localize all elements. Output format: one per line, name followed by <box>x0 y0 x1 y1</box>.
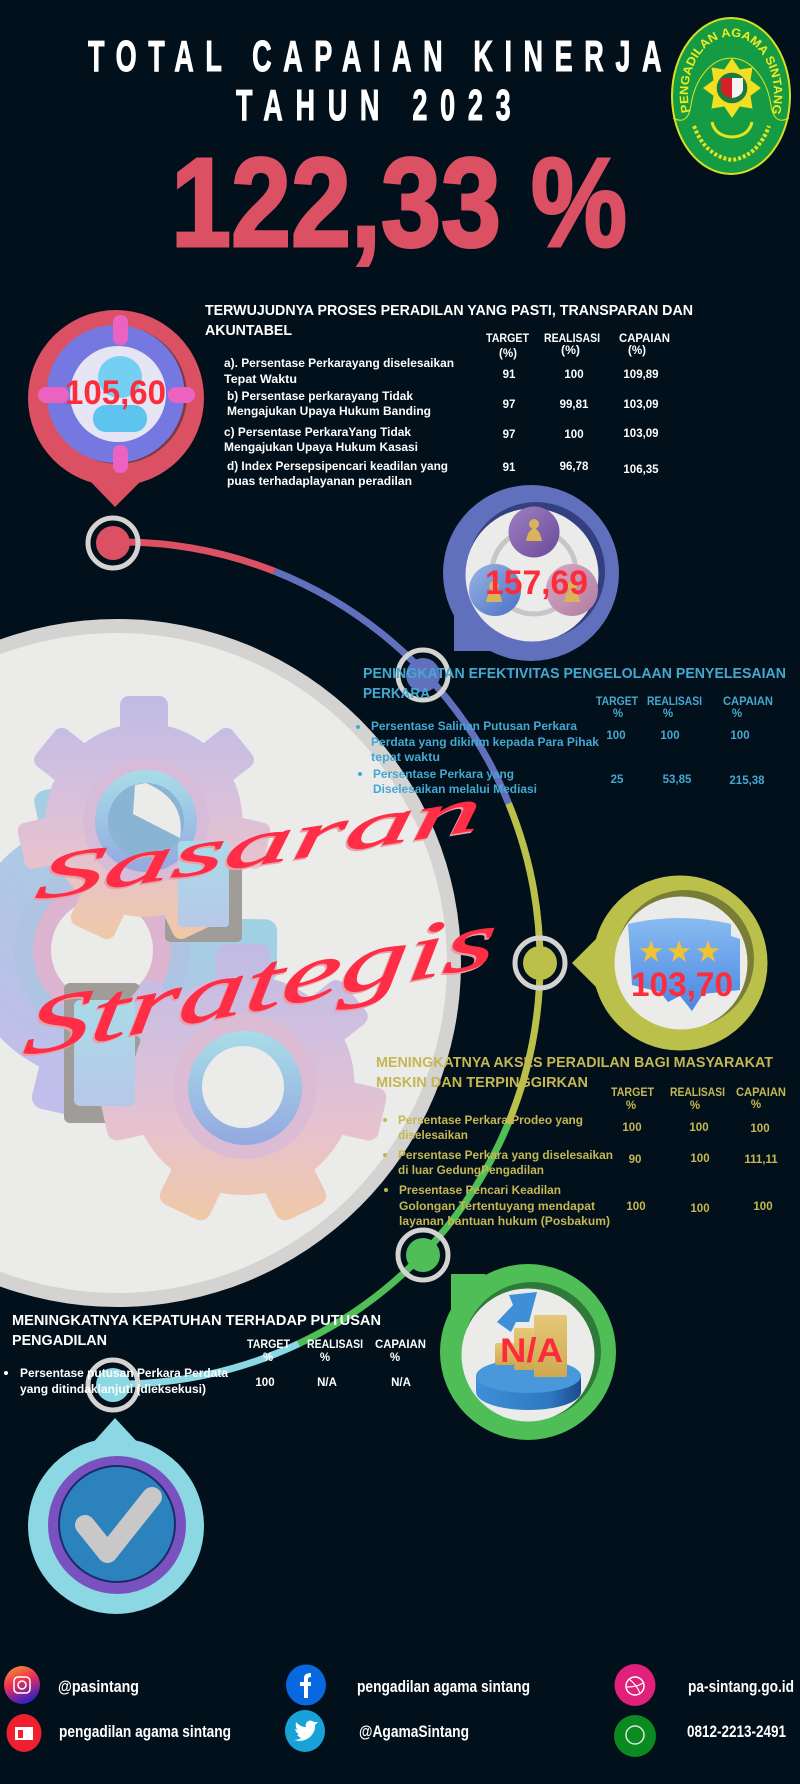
table header: % <box>263 1352 273 1364</box>
script title: Sasaran Strategis: Strategis <box>20 893 502 1074</box>
values: 109,89 <box>623 369 659 381</box>
values: 91 <box>503 369 516 381</box>
indicators: puas terhadaplayanan peradilan <box>227 476 412 488</box>
facebook <box>286 1664 530 1706</box>
gray block behind upper gear <box>165 820 242 942</box>
upper glass block <box>178 841 229 927</box>
table header: % <box>663 708 673 720</box>
pin 2: people network icon <box>443 485 619 661</box>
table header: % <box>390 1352 400 1364</box>
pin 5: check mark icon <box>28 1418 204 1614</box>
value: 103,70 <box>631 966 733 1004</box>
section 1: proses peradilan <box>205 303 693 488</box>
video channel <box>6 1714 231 1752</box>
table header: CAPAIAN <box>375 1339 426 1351</box>
values: 100 <box>564 429 584 441</box>
values: 100 <box>622 1122 642 1134</box>
footer social links <box>4 1664 794 1757</box>
table header <box>596 696 773 720</box>
table header: REALISASI <box>307 1339 363 1351</box>
heading: MISKIN DAN TERPINGGIRKAN <box>376 1075 588 1091</box>
table header: % <box>320 1352 330 1364</box>
timeline nodes <box>88 518 565 1410</box>
heading: MENINGKATNYA AKSES PERADILAN BAGI MASYARAKAT <box>376 1055 773 1071</box>
facebook: pengadilan agama sintang <box>357 1677 530 1696</box>
indicators: diselesaikan <box>398 1130 468 1142</box>
values: 100 <box>753 1201 773 1213</box>
table header <box>486 333 670 360</box>
pin 1: target icon <box>28 310 204 507</box>
values: 53,85 <box>663 774 692 786</box>
bars <box>495 1315 567 1377</box>
indicators: Persentase Perkara Prodeo yang <box>398 1115 583 1127</box>
indicators: tepat waktu <box>371 752 440 764</box>
stars <box>640 940 719 962</box>
table header: CAPAIAN <box>619 333 670 345</box>
indicators: b) Persentase perkarayang Tidak <box>227 391 414 403</box>
indicators <box>356 721 600 796</box>
indicators: layanan bantuan hukum (Posbakum) <box>399 1216 610 1228</box>
indicators: Diselesaikan melalui Mediasi <box>373 784 537 796</box>
values: 111,11 <box>744 1154 778 1166</box>
values: 99,81 <box>560 399 589 411</box>
logo: Pengadilan Agama Sintang: PENGADILAN AGAMA SINTANG <box>680 28 782 114</box>
section 2: efektivitas pengelolaan <box>356 666 786 796</box>
table header: REALISASI <box>647 696 702 708</box>
title: TOTAL CAPAIAN KINERJA <box>88 31 662 81</box>
indicators: Persentase putusan Perkara Perdata <box>20 1368 229 1380</box>
logo: Pengadilan Agama Sintang <box>671 17 791 175</box>
heading <box>12 1313 381 1349</box>
heading: PERKARA <box>363 686 430 702</box>
indicators: Mengajukan Upaya Hukum Banding <box>227 406 431 418</box>
indicators <box>224 358 454 488</box>
people circles <box>469 506 598 616</box>
table header: REALISASI <box>544 333 600 345</box>
table header: CAPAIAN <box>723 696 773 708</box>
website <box>614 1664 794 1706</box>
lower glass block <box>74 1000 135 1106</box>
title <box>88 31 662 130</box>
values: 90 <box>629 1154 641 1166</box>
check mark <box>85 1497 152 1553</box>
heading <box>376 1055 773 1091</box>
chart base <box>476 1376 581 1410</box>
section 3: akses peradilan <box>376 1055 786 1228</box>
table header: % <box>613 708 623 720</box>
script title: Sasaran Strategis <box>20 772 502 1074</box>
instagram <box>4 1666 139 1704</box>
table header: (%) <box>499 348 517 360</box>
total percentage figure: 122,33 % <box>171 132 627 273</box>
heading: PENGADILAN <box>12 1333 107 1349</box>
values: 106,35 <box>623 464 659 476</box>
title: TAHUN 2023 <box>236 80 511 130</box>
indicators <box>4 1368 229 1396</box>
table header: TARGET <box>247 1339 290 1351</box>
indicators: Tepat Waktu <box>224 374 297 386</box>
values <box>606 730 765 787</box>
indicators: di luar GedungPengadilan <box>398 1165 544 1177</box>
values: 215,38 <box>729 775 765 787</box>
large gear disc illustration <box>0 619 461 1307</box>
heading: TERWUJUDNYA PROSES PERADILAN YANG PASTI, TRANSPARAN DAN <box>205 303 693 319</box>
heading <box>363 666 786 702</box>
table header <box>611 1087 786 1112</box>
table header: TARGET <box>486 333 529 345</box>
values: 100 <box>606 730 626 742</box>
table header: % <box>626 1100 636 1112</box>
table header: % <box>751 1099 761 1111</box>
video channel: pengadilan agama sintang <box>59 1722 231 1741</box>
values <box>255 1377 411 1389</box>
indicators: Persentase Perkara yang diselesaikan <box>398 1150 613 1162</box>
value: 157,69 <box>485 564 588 602</box>
rear blue gear <box>0 788 278 1114</box>
timeline arc <box>113 542 540 1384</box>
pin 4: growth chart icon <box>440 1264 616 1440</box>
values: 100 <box>660 730 680 742</box>
values <box>622 1122 778 1215</box>
indicators: c) Persentase PerkaraYang Tidak <box>224 427 412 439</box>
indicators: Perdata yang dikirim kepada Para Pihak <box>371 737 600 749</box>
values: 100 <box>750 1123 770 1135</box>
instagram: @pasintang <box>58 1677 139 1696</box>
section 4: kepatuhan putusan <box>4 1313 426 1396</box>
table header: % <box>690 1100 700 1112</box>
values: 100 <box>689 1122 709 1134</box>
values: 100 <box>255 1377 275 1389</box>
values: 97 <box>503 429 515 441</box>
values: 25 <box>611 774 624 786</box>
indicators: a). Persentase Perkarayang diselesaikan <box>224 358 454 370</box>
indicators: Persentase Perkara yang <box>373 769 514 781</box>
lower gear <box>100 944 386 1226</box>
indicators: Mengajukan Upaya Hukum Kasasi <box>224 442 418 454</box>
upper gear <box>18 696 270 944</box>
values: 103,09 <box>623 428 659 440</box>
indicators: yang ditindaklanjuti (dieksekusi) <box>20 1384 206 1396</box>
table header: % <box>732 708 742 720</box>
indicators: Presentase Pencari Keadilan <box>399 1185 561 1197</box>
values: N/A <box>391 1377 411 1389</box>
values: 91 <box>503 462 516 474</box>
values: 100 <box>690 1203 710 1215</box>
heading <box>205 303 693 339</box>
table header: CAPAIAN <box>736 1087 786 1099</box>
pin 3: rating bubble icon <box>572 876 768 1050</box>
heading: AKUNTABEL <box>205 323 292 339</box>
values: N/A <box>317 1377 337 1389</box>
gray block behind lower gear <box>64 983 140 1123</box>
target ring <box>38 315 195 473</box>
speech bubble <box>628 918 740 1011</box>
values: 100 <box>690 1153 710 1165</box>
table header: (%) <box>628 345 646 357</box>
table header <box>247 1339 426 1364</box>
indicators: Persentase Salinan Putusan Perkara <box>371 721 578 733</box>
twitter <box>285 1710 469 1752</box>
value: N/A <box>500 1332 563 1370</box>
values: 100 <box>730 730 750 742</box>
indicators: Golongan Tertentuyang mendapat <box>399 1201 595 1213</box>
twitter: @AgamaSintang <box>359 1722 469 1741</box>
table header: (%) <box>561 345 580 357</box>
values: 100 <box>564 369 584 381</box>
values: 97 <box>503 399 515 411</box>
script title: Sasaran Strategis: Sasaran <box>32 772 488 914</box>
values: 96,78 <box>560 461 589 473</box>
whatsapp <box>614 1715 786 1757</box>
values: 100 <box>626 1201 646 1213</box>
table header: REALISASI <box>670 1087 725 1099</box>
arrow <box>497 1292 537 1332</box>
value: 105,60 <box>65 374 166 412</box>
heading: MENINGKATNYA KEPATUHAN TERHADAP PUTUSAN <box>12 1313 381 1329</box>
values <box>503 369 659 476</box>
table header: TARGET <box>596 696 638 708</box>
heading: PENINGKATAN EFEKTIVITAS PENGELOLAAN PENYELESAIAN <box>363 666 786 682</box>
values: 103,09 <box>623 399 659 411</box>
table header: TARGET <box>611 1087 654 1099</box>
indicators: d) Index Persepsipencari keadilan yang <box>227 461 448 473</box>
indicators <box>383 1115 613 1228</box>
